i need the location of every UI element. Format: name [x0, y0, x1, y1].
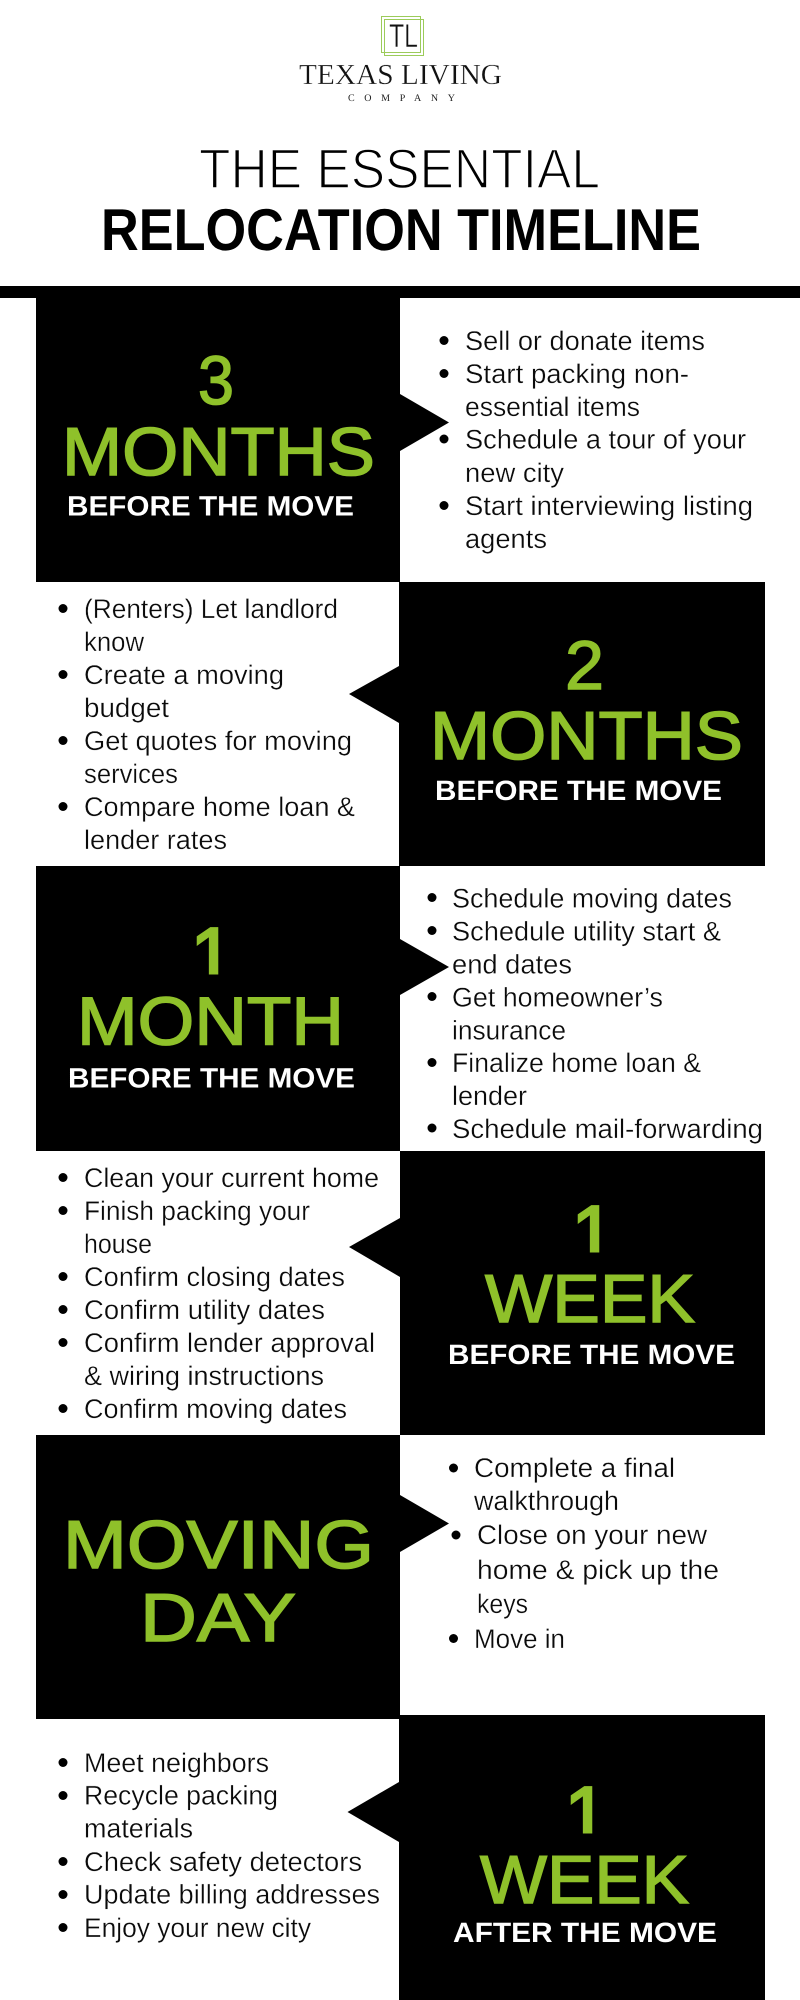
panel: moving day [36, 1435, 719, 1719]
task list: agents [465, 524, 547, 554]
heading: MONTH: MONTH [77, 984, 344, 1060]
logo subtitle: COMPANY [348, 93, 455, 104]
task list: Sell or donate items [465, 326, 705, 356]
task list: (Renters) Let landlord [84, 594, 338, 624]
task list: services [84, 759, 178, 789]
task list: Clean your current home [84, 1163, 379, 1193]
task list: Compare home loan & [84, 792, 355, 822]
heading: 3: 3 [198, 342, 234, 419]
task list [58, 1748, 380, 1943]
black block with arrow [36, 298, 449, 582]
task list: Confirm closing dates [84, 1262, 345, 1292]
panel: 2 months [58, 582, 765, 866]
task list: Get homeowner’s [452, 982, 663, 1012]
black block with arrow [348, 1715, 765, 2000]
subheading: BEFORE THE MOVE [67, 490, 354, 522]
logo: Texas Living Company [299, 16, 502, 104]
heading: WEEK: WEEK [485, 1261, 695, 1337]
logo wordmark: TEXAS LIVING [299, 59, 502, 91]
task list: Schedule mail-forwarding [452, 1114, 763, 1144]
task list: know [84, 627, 144, 657]
task list: end dates [452, 950, 572, 980]
task list: Confirm utility dates [84, 1295, 325, 1325]
task list [440, 326, 753, 554]
subheading: AFTER THE MOVE [453, 1917, 717, 1948]
task list [58, 1163, 379, 1424]
heading: MONTHS: MONTHS [430, 698, 743, 774]
task list: materials [84, 1814, 193, 1844]
task list: Finish packing your [84, 1196, 310, 1226]
black block with arrow [349, 582, 765, 866]
black block with arrow [349, 1151, 765, 1435]
task list: walkthrough [473, 1486, 619, 1516]
task list: Confirm lender approval [84, 1328, 375, 1358]
title line 2: RELOCATION TIMELINE [101, 197, 701, 263]
task list: Start interviewing listing [465, 491, 753, 521]
heading: DAY: DAY [140, 1580, 296, 1656]
heading: MOVING: MOVING [63, 1507, 374, 1583]
task list [58, 594, 355, 855]
panel: 1 month [36, 866, 763, 1151]
task list: home & pick up the [477, 1555, 719, 1585]
subheading: BEFORE THE MOVE [68, 1062, 355, 1094]
subheading: BEFORE THE MOVE [435, 775, 722, 806]
task list: budget [84, 693, 170, 723]
heading: 1: 1 [572, 1189, 615, 1277]
task list: house [84, 1229, 152, 1259]
title [101, 137, 701, 263]
task list: Close on your new [477, 1520, 708, 1550]
task list: essential items [465, 392, 640, 422]
task list: keys [477, 1589, 528, 1619]
task list: Schedule moving dates [452, 884, 732, 914]
heading: WEEK: WEEK [480, 1842, 689, 1918]
panel: 1 week after [58, 1715, 765, 2000]
heading: 2: 2 [565, 627, 604, 704]
heading: 1: 1 [564, 1770, 608, 1858]
header divider bar [0, 286, 800, 298]
black block with arrow [36, 866, 449, 1151]
title line 1: THE ESSENTIAL [199, 137, 600, 200]
task list: Get quotes for moving [84, 726, 352, 756]
panel: 3 months [36, 298, 753, 582]
task list: new city [465, 458, 564, 488]
heading: MONTHS: MONTHS [62, 414, 375, 490]
task list: Meet neighbors [84, 1748, 269, 1778]
task list: Enjoy your new city [84, 1913, 311, 1943]
task list: & wiring instructions [84, 1361, 324, 1391]
heading: 1: 1 [190, 911, 234, 999]
panel: 1 week before [58, 1151, 765, 1435]
task list: Schedule a tour of your [465, 424, 746, 454]
task list: Confirm moving dates [84, 1394, 347, 1424]
task list: Create a moving [84, 660, 284, 690]
task list [449, 1453, 719, 1654]
task list: Finalize home loan & [452, 1048, 701, 1078]
task list: insurance [452, 1016, 566, 1046]
task list: lender rates [84, 825, 227, 855]
task list: lender [452, 1081, 527, 1111]
task list: Update billing addresses [84, 1880, 380, 1910]
task list: Complete a final [474, 1453, 675, 1483]
task list [428, 884, 763, 1144]
black block with arrow [36, 1435, 449, 1719]
subheading: BEFORE THE MOVE [448, 1339, 735, 1370]
task list: Start packing non- [465, 359, 689, 389]
icon: TL monogram: TL [389, 17, 418, 54]
task list: Schedule utility start & [452, 916, 721, 946]
task list: Recycle packing [84, 1780, 278, 1810]
task list: Move in [474, 1624, 565, 1654]
task list: Check safety detectors [84, 1847, 362, 1877]
